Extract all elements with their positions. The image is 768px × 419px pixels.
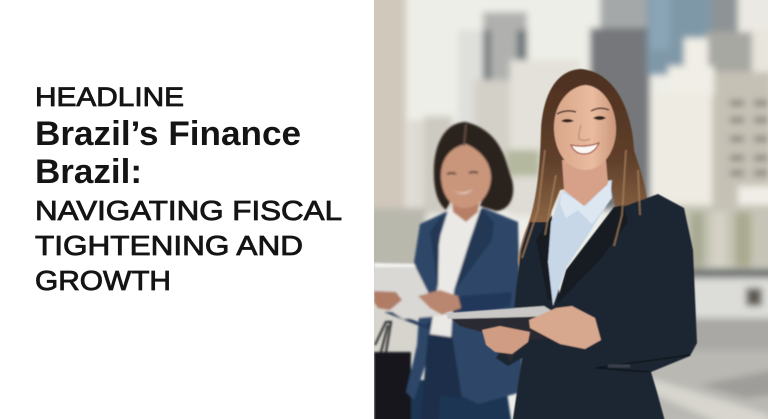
heading: Brazil's Finance: Brazil’s Finance — [35, 115, 301, 153]
hair strands over shoulders — [522, 150, 640, 258]
eyebrows — [557, 108, 609, 114]
hair back — [518, 69, 649, 266]
photo: two businesswomen with tablets in a city — [366, 0, 768, 419]
heading: HEADLINE: HEADLINE — [35, 82, 184, 112]
hair — [434, 122, 513, 211]
subheading line 3: GROWTH — [35, 265, 171, 296]
handbag — [374, 322, 411, 419]
subheading line 1: NAVIGATING FISCAL — [35, 195, 342, 226]
smile — [571, 143, 599, 154]
lapels — [430, 208, 494, 290]
woman in foreground — [446, 69, 697, 419]
dark tablet — [452, 317, 548, 361]
navy trousers — [411, 380, 512, 419]
neck — [562, 160, 608, 206]
headline text block — [35, 82, 342, 296]
white tablet — [374, 264, 440, 319]
heading: Brazil: Brazil: — [35, 153, 142, 191]
neck — [452, 202, 480, 223]
light blue shirt — [548, 180, 612, 306]
face — [554, 85, 616, 170]
woman in background — [374, 122, 522, 419]
hands — [374, 291, 402, 310]
eyes — [561, 116, 606, 122]
navy blazer — [406, 208, 522, 404]
hands — [482, 326, 530, 354]
subheading line 2: TIGHTENING AND — [35, 230, 303, 261]
dark navy blazer — [496, 194, 697, 419]
sleeve button cuff — [608, 364, 630, 368]
blurred city background — [366, 0, 768, 419]
face — [441, 144, 491, 208]
white shirt — [430, 208, 482, 337]
left white panel — [0, 0, 373, 419]
nose shadow — [579, 125, 590, 140]
